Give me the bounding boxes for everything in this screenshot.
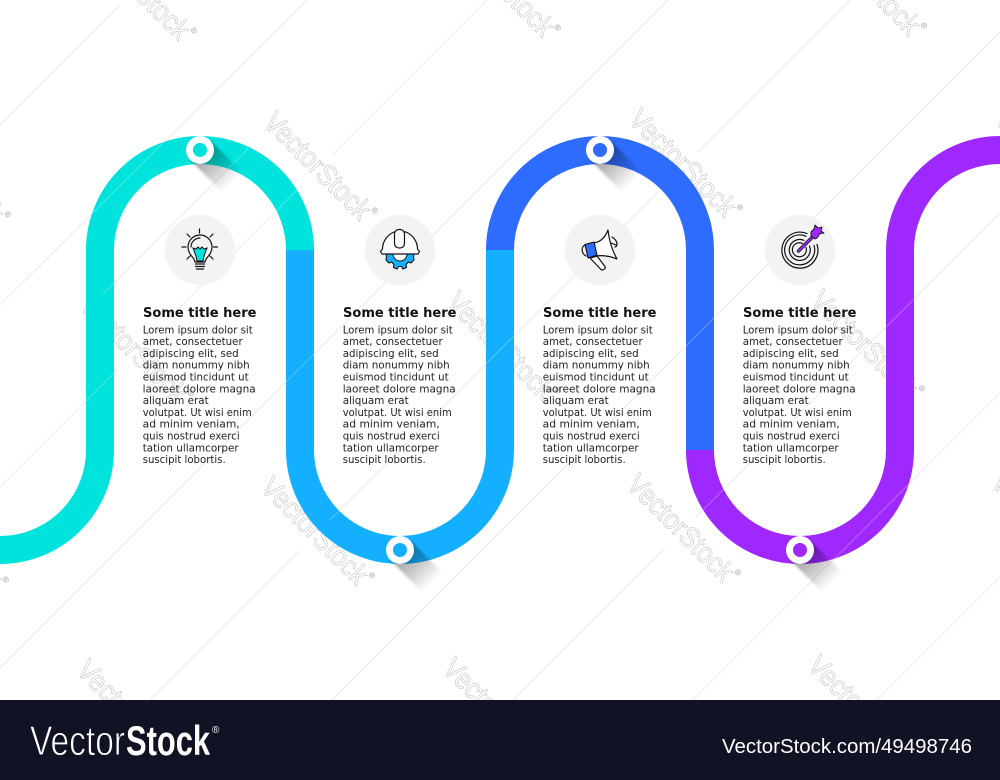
step 3 body: suscipit lobortis. — [543, 454, 626, 466]
step 4 body: euismod tincidunt ut — [743, 372, 849, 384]
background: VectorStock watermarks: VectorStock — [440, 286, 561, 407]
background: VectorStock watermarks: ® — [3, 209, 13, 220]
step 2 body: amet, consectetuer — [343, 336, 443, 348]
winding timeline road — [0, 150, 1000, 550]
step 4 body: adipiscing elit, sed — [743, 348, 839, 360]
background: VectorStock watermarks: ® — [1, 574, 11, 585]
step 1 body: quis nostrud exerci — [143, 430, 240, 442]
step 2 body: suscipit lobortis. — [343, 454, 426, 466]
background: VectorStock watermarks: VectorStock — [622, 103, 743, 224]
background: VectorStock watermarks: ® — [189, 25, 199, 36]
step 1 body: diam nonummy nibh — [143, 360, 250, 372]
step 3 body — [543, 324, 656, 466]
step 3 body: laoreet dolore magna — [543, 383, 656, 395]
icon: helmet and gear — [365, 215, 435, 285]
step 3 body: aliquam erat — [543, 395, 609, 407]
background: VectorStock watermarks: ® — [733, 567, 743, 578]
step 3 body: Lorem ipsum dolor sit — [543, 324, 653, 336]
step 3 body: amet, consectetuer — [543, 336, 643, 348]
background: VectorStock watermarks: ® — [370, 205, 380, 216]
background: VectorStock watermarks: VectorStock — [73, 289, 194, 410]
step 3 body: diam nonummy nibh — [543, 360, 650, 372]
step 3 body: adipiscing elit, sed — [543, 348, 639, 360]
step 1 body: euismod tincidunt ut — [143, 372, 249, 384]
step 4 body: suscipit lobortis. — [743, 454, 826, 466]
step 4 title: Some title here — [743, 305, 856, 321]
step 2 text block — [343, 305, 456, 466]
background: VectorStock watermarks: ® — [367, 570, 377, 581]
step 4 text block — [743, 305, 856, 466]
step 1 body: adipiscing elit, sed — [143, 348, 239, 360]
background: VectorStock watermarks: VectorStock — [257, 106, 378, 227]
step 4 body: amet, consectetuer — [743, 336, 843, 348]
step 2 body: diam nonummy nibh — [343, 360, 450, 372]
footer logo — [30, 717, 220, 764]
step 3 body: quis nostrud exerci — [543, 430, 640, 442]
step 4 body — [743, 324, 856, 466]
road segment: purple — [700, 150, 1000, 550]
step 4 body: tation ullamcorper — [743, 442, 839, 454]
background: VectorStock watermarks: ® — [735, 202, 745, 213]
icon: megaphone — [565, 215, 635, 285]
step 2 body: tation ullamcorper — [343, 442, 439, 454]
step 3 body: tation ullamcorper — [543, 442, 639, 454]
step 3 body: euismod tincidunt ut — [543, 372, 649, 384]
step 1 body: Lorem ipsum dolor sit — [143, 324, 253, 336]
road segment: blue — [500, 150, 700, 450]
footer logo: Stock — [126, 717, 210, 764]
step 3 body: ad minim veniam, — [543, 419, 640, 431]
step 1 title: Some title here — [143, 305, 256, 321]
step 1 body: suscipit lobortis. — [143, 454, 226, 466]
step 3 body: volutpat. Ut wisi enim — [543, 407, 652, 419]
background: VectorStock watermarks: ® — [553, 385, 563, 396]
background: VectorStock watermarks: VectorStock — [804, 284, 925, 405]
step 1 body — [143, 324, 256, 466]
step 4 body: diam nonummy nibh — [743, 360, 850, 372]
step 2 body: volutpat. Ut wisi enim — [343, 407, 452, 419]
step 2 body: aliquam erat — [343, 395, 409, 407]
step 1 body: volutpat. Ut wisi enim — [143, 407, 252, 419]
background: VectorStock watermarks: ® — [553, 22, 563, 33]
step 4 body: quis nostrud exerci — [743, 430, 840, 442]
footer image id: VectorStock.com/49498746 — [722, 736, 972, 758]
background: VectorStock watermarks: ® — [919, 20, 929, 31]
step 4 body: aliquam erat — [743, 395, 809, 407]
step 2 body: quis nostrud exerci — [343, 430, 440, 442]
background: VectorStock watermarks: ® — [917, 383, 927, 394]
marker: teal step — [186, 136, 242, 192]
marker: purple step — [786, 536, 842, 592]
icon: target and arrow — [765, 215, 835, 285]
step 4 body: Lorem ipsum dolor sit — [743, 324, 853, 336]
icon: light bulb — [165, 215, 235, 285]
step 2 body — [343, 324, 456, 466]
step 2 body: euismod tincidunt ut — [343, 372, 449, 384]
step 2 body: adipiscing elit, sed — [343, 348, 439, 360]
step 1 body: ad minim veniam, — [143, 419, 240, 431]
step 4 body: laoreet dolore magna — [743, 383, 856, 395]
step 3 text block — [543, 305, 656, 466]
step 1 body: tation ullamcorper — [143, 442, 239, 454]
step 2 title: Some title here — [343, 305, 456, 321]
step 1 body: laoreet dolore magna — [143, 383, 256, 395]
background: VectorStock watermarks: VectorStock — [620, 468, 741, 589]
footer bar — [0, 700, 1000, 780]
background: VectorStock watermarks: ® — [186, 388, 196, 399]
marker: blue step — [586, 136, 642, 192]
step 3 title: Some title here — [543, 305, 656, 321]
step 1 body: amet, consectetuer — [143, 336, 243, 348]
step 2 body: laoreet dolore magna — [343, 383, 456, 395]
road segment: teal — [0, 150, 300, 550]
step 2 body: Lorem ipsum dolor sit — [343, 324, 453, 336]
step 1 text block — [143, 305, 256, 466]
background: VectorStock watermarks: VectorStock — [254, 471, 375, 592]
step 1 body: aliquam erat — [143, 395, 209, 407]
footer logo: ® — [212, 725, 220, 736]
step 4 body: volutpat. Ut wisi enim — [743, 407, 852, 419]
marker: light blue step — [386, 536, 442, 592]
background: VectorStock watermarks: VectorStock — [801, 649, 922, 770]
step 4 body: ad minim veniam, — [743, 419, 840, 431]
step 2 body: ad minim veniam, — [343, 419, 440, 431]
road segment: light blue — [300, 250, 500, 550]
footer logo: Vector — [30, 717, 125, 764]
